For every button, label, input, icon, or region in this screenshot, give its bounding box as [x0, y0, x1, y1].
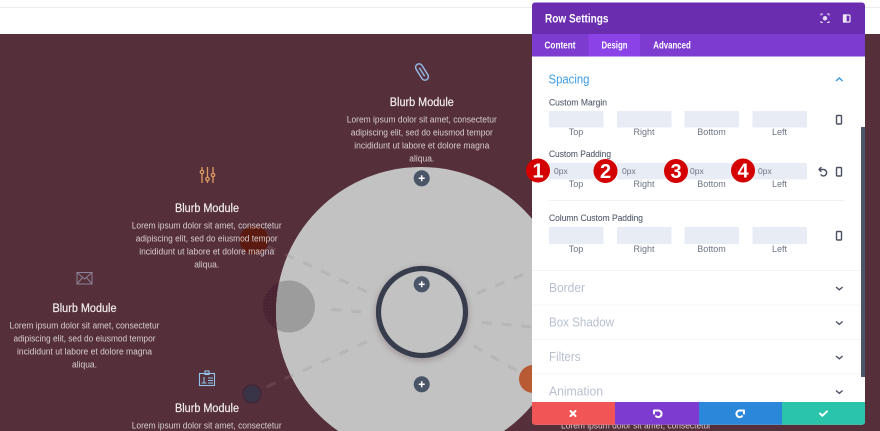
- plus button: bottom: [414, 376, 430, 392]
- center ring: [378, 268, 466, 358]
- custom margin group: Bottom: [697, 127, 726, 137]
- collapsed sections: Box Shadow: [549, 314, 615, 330]
- icon: expand: [821, 14, 829, 22]
- custom padding group: Left: [772, 179, 788, 189]
- body text: Lorem ipsum dolor sit amet, consectetur: [10, 320, 160, 331]
- body text: Lorem ipsum dolor sit amet, consectetur: [132, 420, 282, 431]
- collapsed sections: [532, 270, 861, 398]
- icon: reset: [819, 168, 827, 176]
- collapsed sections: Filters: [549, 349, 581, 364]
- faint dashes outside wheel: [262, 246, 367, 389]
- icon: phone: [836, 116, 842, 124]
- grey circle overlapping wheel: [276, 280, 315, 332]
- icon: phone: [836, 168, 842, 176]
- panel body: [532, 2, 865, 425]
- badge 1: [526, 158, 550, 182]
- badge 2: 2: [600, 161, 611, 183]
- body text: Lorem ipsum dolor sit amet, consectetur: [132, 220, 282, 231]
- footer: undo button: [615, 402, 699, 425]
- divider: [549, 200, 844, 201]
- plus button: center: [414, 276, 430, 292]
- custom margin group: [549, 98, 807, 137]
- collapsed sections: Border: [549, 280, 586, 295]
- body text: adipiscing elit, sed do eiusmod tempor: [136, 233, 278, 244]
- blurb: id card: [132, 371, 282, 431]
- wheel: large grey circle: [276, 167, 566, 431]
- footer: cancel button: [532, 402, 615, 425]
- body text: Lorem ipsum dolor sit amet, consectetur: [347, 114, 497, 125]
- badge 1: 1: [532, 160, 544, 182]
- panel header: [532, 2, 865, 34]
- panel header: Row Settings: [545, 14, 608, 26]
- body text: [132, 220, 282, 270]
- custom padding group: Right: [633, 179, 655, 189]
- column custom padding group: Left: [772, 244, 788, 254]
- orange circle: [519, 365, 547, 393]
- decorative circle: dark plum behind wheel: [263, 280, 315, 332]
- body text: adipiscing elit, sed do eiusmod tempor: [351, 127, 493, 138]
- heading: Blurb Module: [175, 203, 239, 215]
- icon: envelope: [77, 272, 92, 284]
- custom padding group: 0px: [554, 166, 568, 176]
- body text: aliqua.: [194, 259, 219, 270]
- icon: paperclip: [414, 63, 430, 81]
- tab bar: [532, 34, 865, 56]
- custom margin group: Right: [633, 127, 655, 137]
- custom margin group: Left: [772, 127, 788, 137]
- heading: Blurb Module: [175, 403, 239, 415]
- footer: save button: [782, 402, 865, 425]
- heading: Blurb Module: [52, 303, 116, 315]
- custom padding group: Bottom: [697, 179, 726, 189]
- blurb: top: [347, 63, 497, 164]
- icon: sidebar: [844, 15, 850, 22]
- badge 2: [594, 159, 618, 183]
- collapsed sections: Animation: [549, 384, 603, 398]
- icon: sliders: [200, 167, 215, 183]
- decorative circle: dark navy: [242, 384, 262, 404]
- badge 4: 4: [737, 160, 749, 182]
- tab bar: Advanced: [653, 40, 691, 52]
- custom padding group: Custom Padding: [549, 149, 611, 160]
- custom padding group: Top: [569, 179, 583, 189]
- heading: Blurb Module: [390, 97, 454, 109]
- body text: aliqua.: [409, 153, 434, 164]
- badge 3: [664, 159, 688, 183]
- custom padding group: 0px: [622, 166, 636, 176]
- body text: aliqua.: [72, 359, 97, 370]
- column custom padding group: Top: [569, 244, 583, 254]
- column custom padding group: [549, 213, 807, 254]
- column custom padding group: Column Custom Padding: [549, 213, 643, 224]
- custom margin group: Custom Margin: [549, 98, 607, 108]
- column custom padding group: Bottom: [697, 244, 726, 254]
- custom padding group: 0px: [758, 166, 772, 176]
- footer: redo button: [699, 402, 782, 425]
- dashed spokes: [287, 254, 532, 377]
- body text: adipiscing elit, sed do eiusmod tempor: [14, 333, 156, 344]
- body text: incididunt ut labore et dolore magna: [139, 246, 275, 257]
- section heading: spacing: Spacing: [548, 72, 590, 86]
- decorative circle: dark red: [240, 226, 268, 254]
- custom padding group: [549, 149, 807, 189]
- icon: phone: [836, 232, 842, 240]
- panel: row settings: [526, 2, 865, 425]
- body text: incididunt ut labore et dolore magna: [354, 140, 490, 151]
- body text: [10, 320, 160, 370]
- plus button: top: [414, 170, 430, 186]
- column custom padding group: Right: [633, 244, 655, 254]
- custom padding group: 0px: [690, 166, 704, 176]
- body text: [347, 114, 497, 164]
- tab bar: Content: [544, 40, 576, 52]
- custom margin group: Top: [569, 127, 583, 137]
- badge 3: 3: [670, 161, 682, 183]
- body text: incididunt ut labore et dolore magna: [17, 346, 153, 357]
- body text under settings panel: Lorem ipsum dolor sit amet, consectetur: [561, 420, 712, 431]
- blurb: sliders: [132, 167, 282, 270]
- badge 4: [731, 158, 755, 182]
- scrollbar: [861, 127, 865, 377]
- icon: chevron up: [836, 78, 843, 81]
- icon: id card: [200, 371, 214, 386]
- blurb: envelope: [10, 272, 160, 370]
- tab bar: Design: [602, 40, 628, 52]
- top white bar: [0, 0, 880, 34]
